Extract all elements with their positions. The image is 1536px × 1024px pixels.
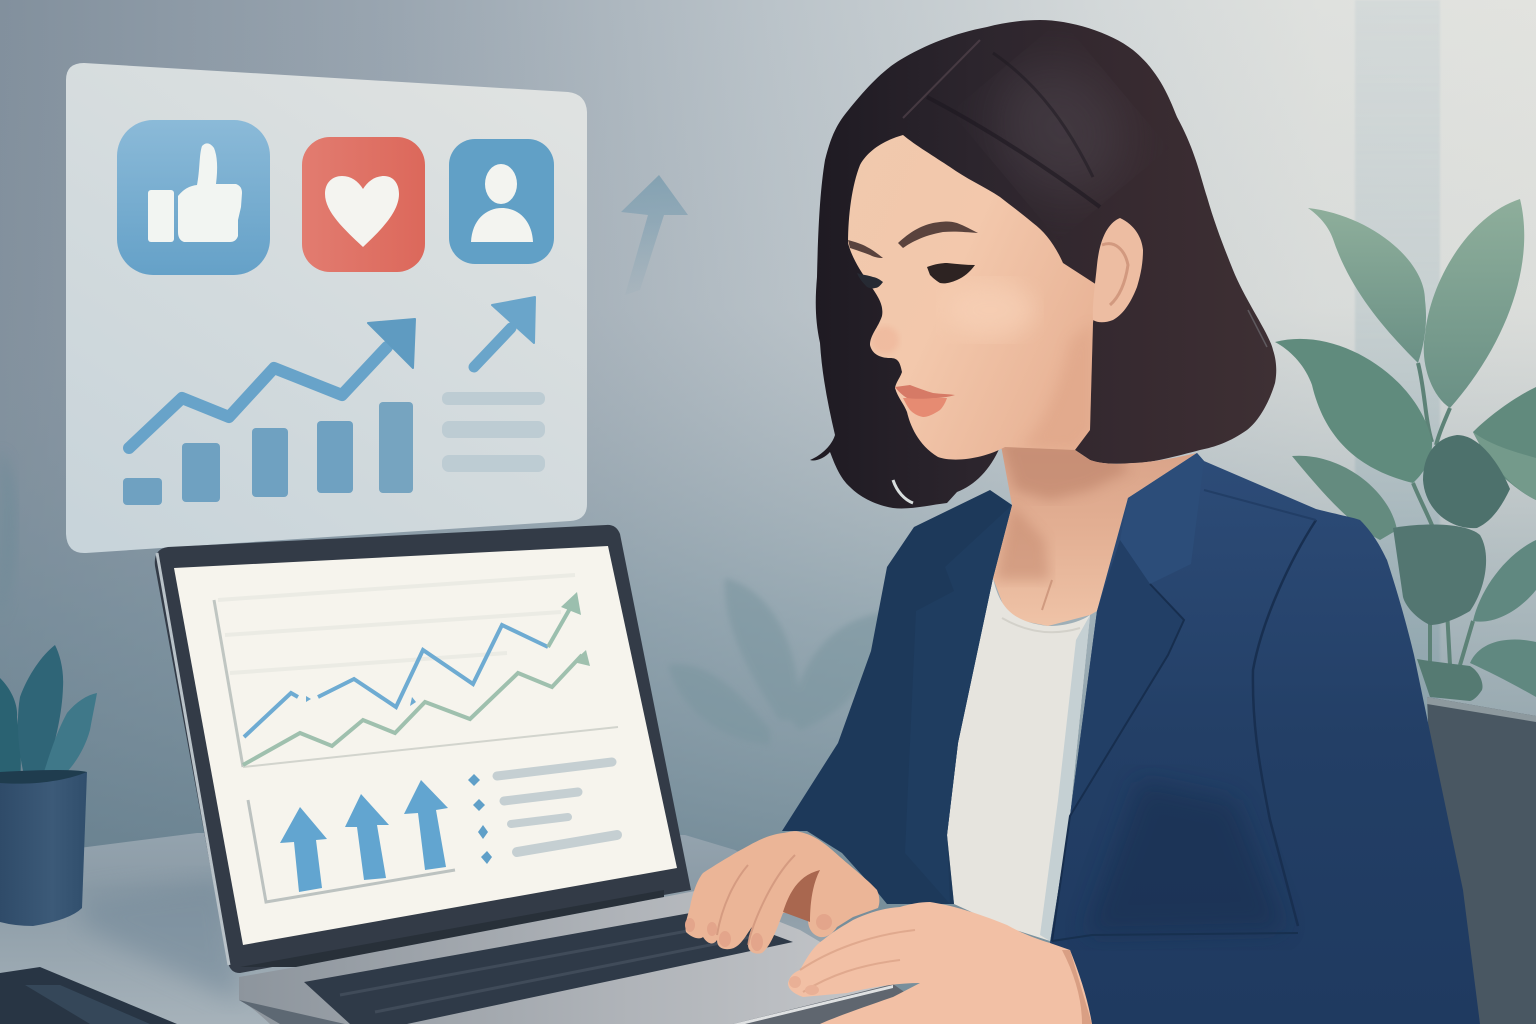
screen arrows chart: [248, 780, 455, 902]
background plant, blurred, centre: [668, 578, 885, 745]
icon: heart: [302, 137, 425, 272]
potted plant: [0, 645, 97, 926]
faint arrow: [621, 175, 688, 295]
blazer shadow: [1085, 780, 1285, 935]
shirt: [947, 578, 1090, 941]
eye brows and eyes: [848, 222, 978, 288]
plant stems: [1413, 363, 1473, 665]
blazer: [782, 453, 1480, 1024]
ear: [1093, 218, 1143, 322]
text placeholder lines: [442, 392, 545, 472]
neck and chest: [993, 440, 1197, 626]
laptop base and keyboard: [239, 890, 950, 1024]
desk: [0, 833, 900, 1024]
icon: thumbs up: [117, 120, 270, 275]
chair back: [1427, 697, 1536, 1024]
pot: [0, 772, 87, 926]
right hand: [788, 902, 1092, 1024]
tablet on desk: [0, 967, 177, 1024]
screen line chart: [214, 575, 618, 767]
blazer left side: [782, 490, 1012, 904]
lips: [895, 385, 955, 417]
woman: [685, 20, 1480, 1024]
plant: right side: [1275, 199, 1536, 701]
laptop: [155, 525, 950, 1024]
cheek blush and nose: [871, 282, 1093, 450]
icon: person: [449, 139, 554, 264]
blazer collar: [1120, 453, 1204, 584]
blazer right side: [1050, 453, 1480, 1024]
face: [848, 135, 1097, 460]
background plant, blurred, left edge: [0, 450, 18, 620]
screen list: [468, 762, 617, 864]
plant leaves: [1308, 208, 1426, 363]
bar chart: [123, 402, 413, 505]
laptop lid: [155, 525, 691, 973]
hair: [810, 20, 1276, 508]
left hand: [685, 831, 879, 954]
laptop screen: [174, 546, 677, 945]
plant leaves: [0, 645, 97, 785]
small arrow: [474, 297, 535, 367]
blazer lapel: [1050, 540, 1184, 941]
line chart with arrow: [129, 319, 415, 448]
floating dashboard panel: [66, 63, 587, 553]
